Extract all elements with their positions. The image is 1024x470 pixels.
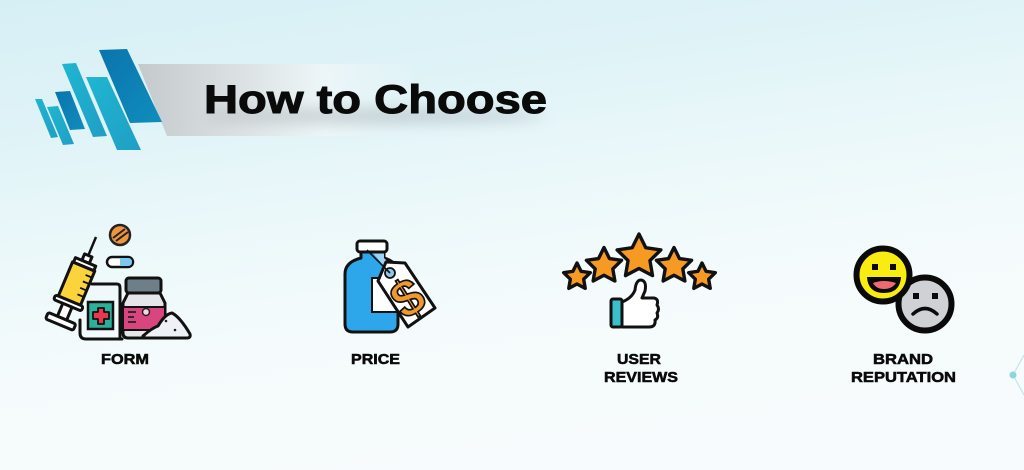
title: How to Choose [204, 78, 547, 122]
label: user reviews [604, 352, 678, 386]
icon: star rating with thumbs up [564, 234, 715, 327]
icon: syringe [46, 231, 110, 330]
icon: price bottle and tag [345, 241, 436, 332]
network decoration [1010, 355, 1024, 395]
label: brand reputation: BRAND [873, 352, 933, 368]
icon: powder pile [143, 313, 190, 338]
icon: blue bottle [345, 241, 398, 332]
icon: sad face [898, 278, 952, 330]
title banner [138, 64, 545, 136]
label: user reviews: USER [617, 352, 662, 368]
icon: pink bottle [123, 278, 165, 338]
label: form: FORM [101, 352, 149, 368]
icon: happy face [856, 248, 910, 302]
label: user reviews: REVIEWS [604, 370, 678, 386]
icon: happy and sad faces [856, 248, 952, 330]
icon: orange tablet [110, 225, 130, 245]
icon: five stars [564, 234, 715, 288]
icon: capsule [107, 257, 133, 267]
icon: green jar [80, 284, 122, 339]
logo: slanted bars [35, 49, 162, 150]
label: brand reputation: REPUTATION [851, 370, 956, 386]
icon: medicine forms [46, 225, 190, 339]
label: price: PRICE [351, 352, 400, 368]
label: brand reputation [851, 352, 956, 386]
icon: thumbs up [611, 280, 658, 327]
icon: price tag: $ [380, 266, 436, 331]
